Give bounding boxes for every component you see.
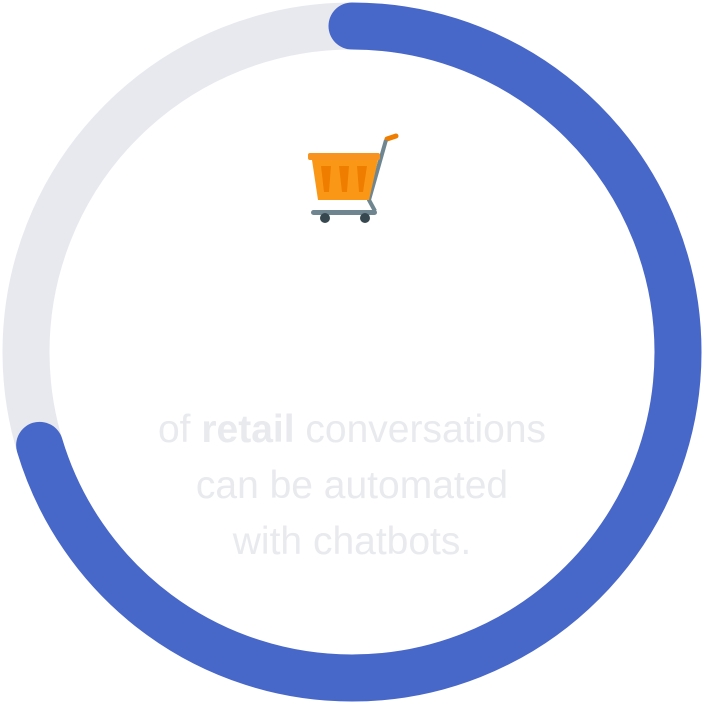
caption text: with chatbots. (233, 520, 471, 563)
caption text (158, 408, 546, 563)
icon: shopping cart (308, 136, 396, 223)
caption text: can be automated (196, 464, 508, 507)
caption text: of retail conversations (158, 408, 546, 451)
